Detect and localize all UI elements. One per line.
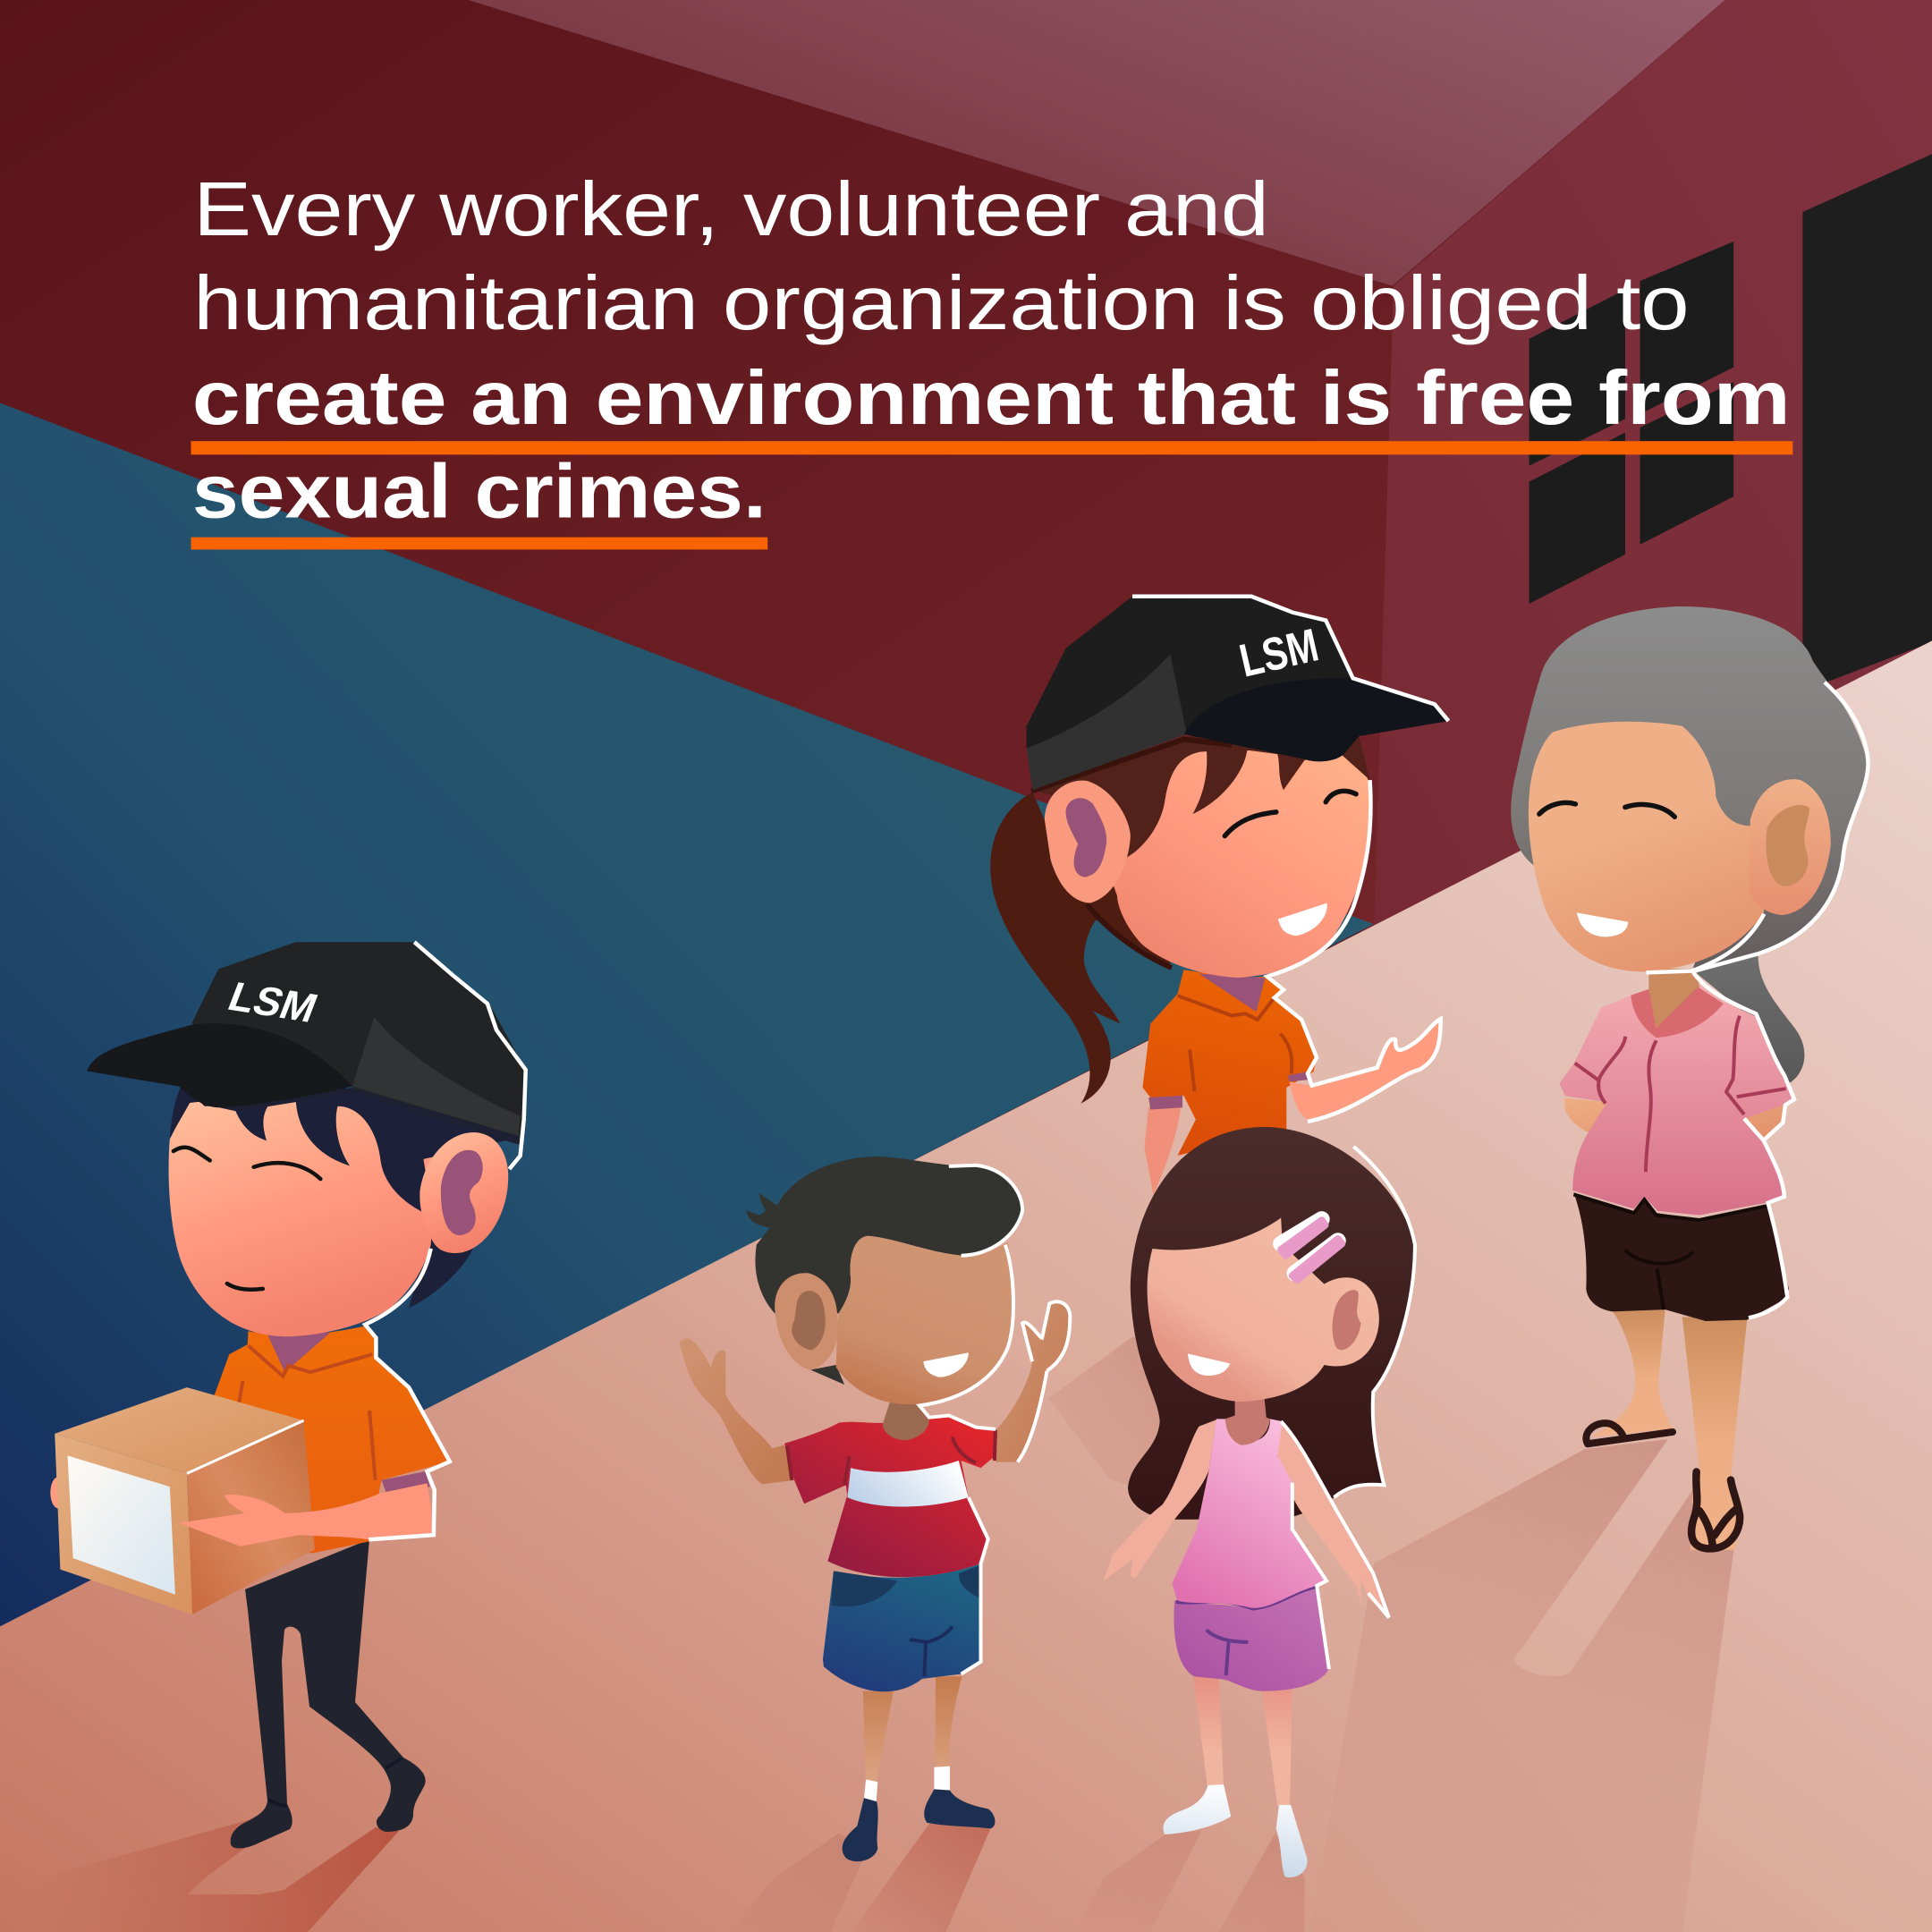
boy pockets: [831, 1565, 981, 1606]
boy foot shadow: [848, 1824, 990, 1932]
woman ponytail: [990, 792, 1172, 1104]
boy ear: [775, 1273, 838, 1369]
girl legs: [1192, 1672, 1292, 1807]
man cap crown: [191, 942, 526, 1145]
woman neck: [1199, 974, 1266, 1012]
woman sleeve cuffs: [1148, 1072, 1310, 1109]
grandmother ponytail: [1695, 956, 1804, 1083]
underline one: [191, 441, 1792, 454]
man cap brim: [87, 1023, 352, 1107]
woman eyes: [1224, 791, 1356, 836]
box front: [55, 1434, 192, 1614]
floor: [0, 640, 1932, 1932]
man white outline: [365, 942, 526, 1539]
grandmother eyes: [1539, 802, 1674, 817]
man inner ear: [441, 1150, 483, 1235]
boy legs: [863, 1676, 962, 1782]
boy shorts: [823, 1563, 981, 1691]
woman cap brim: [1183, 678, 1448, 761]
man collar lines: [239, 1346, 376, 1480]
character: aid worker man carrying box: [50, 942, 526, 1614]
character: grandmother face: [1529, 682, 1868, 972]
line four bold: sexual crimes.: [192, 450, 767, 535]
character: grandmother body: [1559, 969, 1795, 1550]
girl shorts: [1174, 1586, 1329, 1691]
boy inner ear: [792, 1291, 826, 1351]
clip fill: [1281, 1220, 1342, 1280]
boy shoes: [843, 1789, 995, 1861]
grandmother shorts: [1573, 1192, 1789, 1321]
grandmother collar: [1631, 987, 1724, 1038]
boy neck: [883, 1402, 929, 1440]
woman head: [1087, 748, 1372, 978]
man arm and hand: [179, 1483, 435, 1546]
woman shirt: [1142, 970, 1317, 1156]
grandmother face shape: [1529, 722, 1764, 971]
woman ear: [1045, 781, 1131, 903]
man shirt: [190, 1326, 450, 1556]
box white label: [68, 1455, 175, 1595]
girl arms: [1104, 1419, 1389, 1617]
girl shorts seams: [1176, 1587, 1317, 1675]
woman mouth: [1278, 903, 1327, 936]
woman inner ear: [1066, 798, 1106, 877]
boy right arm: [996, 1301, 1070, 1462]
grandmother inner ear: [1767, 805, 1809, 886]
man ear: [419, 1132, 508, 1253]
grandmother front sandal: [1691, 1471, 1740, 1548]
woman left arm: [1144, 1107, 1181, 1195]
woman cap logo: LSM: [1235, 619, 1323, 688]
girl mouth: [1188, 1353, 1230, 1376]
boy mouth: [923, 1352, 969, 1377]
woman cap side: [1027, 655, 1187, 790]
boy socks: [864, 1767, 950, 1801]
woman hair shadow line: [1031, 740, 1232, 968]
right wall: [1374, 0, 1932, 930]
line one: Every worker, volunteer and: [193, 167, 1269, 252]
back wall: [0, 0, 1399, 936]
boy face: [836, 1236, 1013, 1404]
window panes: [1530, 242, 1733, 604]
grandmother shorts seams: [1573, 1195, 1767, 1309]
grandmother blouse seams: [1575, 1016, 1786, 1172]
girl hair: [1128, 1127, 1415, 1520]
faint shadow behind the girl: [1048, 1337, 1189, 1504]
man cap band: [219, 1088, 519, 1145]
grandmother ear cover: [1749, 779, 1831, 915]
woman white outline: [1132, 597, 1448, 1122]
dark door: [1802, 154, 1932, 691]
boy left arm: [679, 1338, 794, 1484]
woman hair: [1032, 736, 1370, 860]
man cap logo: LSM: [222, 973, 324, 1030]
girl white outline: [1281, 1147, 1415, 1669]
man sleeve cuff: [382, 1471, 430, 1496]
box edge highlight: [187, 1420, 304, 1473]
headline text: [191, 167, 1792, 549]
man floor shadow: [18, 1820, 399, 1932]
girl face: [1148, 1217, 1379, 1402]
character: woman aid worker: [990, 597, 1448, 1195]
grandmother floor shadow: [1310, 1439, 1734, 1932]
grandmother blouse: [1559, 985, 1795, 1215]
grandmother back leg: [1592, 1309, 1673, 1436]
box top: [55, 1387, 304, 1473]
grandmother neck: [1648, 969, 1699, 1029]
ceiling: [468, 0, 1725, 286]
boy nape hair: [810, 1365, 844, 1385]
cardboard box: [55, 1387, 315, 1614]
grandmother ear: [1752, 779, 1831, 915]
boy floor shadows: [725, 1834, 868, 1932]
boy t-shirt: [784, 1417, 996, 1577]
box side: [187, 1420, 315, 1614]
blue wall: [0, 402, 1374, 1629]
girl socks: [1163, 1784, 1308, 1877]
man cap side panel: [352, 1017, 521, 1136]
woman collar lines: [1178, 996, 1292, 1091]
girl top: [1172, 1419, 1326, 1608]
pants shape: [231, 1539, 426, 1848]
boy white outline: [919, 1165, 1070, 1674]
character: grandmother head: [1511, 606, 1867, 1083]
boy shirt stripe: [847, 1461, 969, 1506]
girl hair clips: [1281, 1219, 1342, 1280]
boy hair: [746, 1157, 1022, 1313]
man eyes and mouth: [174, 1148, 320, 1290]
grandmother body outline: [1693, 973, 1794, 1318]
line three bold: create an environment that is free from: [192, 356, 1791, 441]
man hair: [170, 1083, 513, 1216]
woman right arm: [1290, 1019, 1441, 1122]
grandmother arms: [1564, 1098, 1784, 1140]
boy shorts seams: [910, 1626, 953, 1676]
girl floor shadows: [1074, 1831, 1304, 1932]
man neck: [267, 1333, 330, 1372]
grandmother mouth: [1577, 912, 1628, 936]
line two: humanitarian organization is obliged to: [193, 261, 1690, 346]
grandmother hair: [1511, 606, 1867, 971]
man head: [169, 1093, 438, 1336]
woman cap crown: [1027, 597, 1353, 748]
grandmother back sandal: [1586, 1423, 1673, 1444]
girl neck: [1225, 1397, 1270, 1445]
man hand behind box: [50, 1477, 66, 1509]
sock bands: [268, 1758, 402, 1806]
grandmother front leg: [1682, 1317, 1747, 1550]
grandmother white outline: [1647, 682, 1868, 972]
clip outline: [1281, 1219, 1338, 1273]
man back hair: [409, 1225, 475, 1308]
character: boy: [679, 1157, 1070, 1932]
man pants and socks: [231, 1539, 426, 1848]
character: girl: [1074, 1127, 1415, 1932]
girl inner ear: [1333, 1290, 1361, 1350]
underline two: [191, 538, 767, 549]
boy shirt seams: [787, 1430, 996, 1485]
